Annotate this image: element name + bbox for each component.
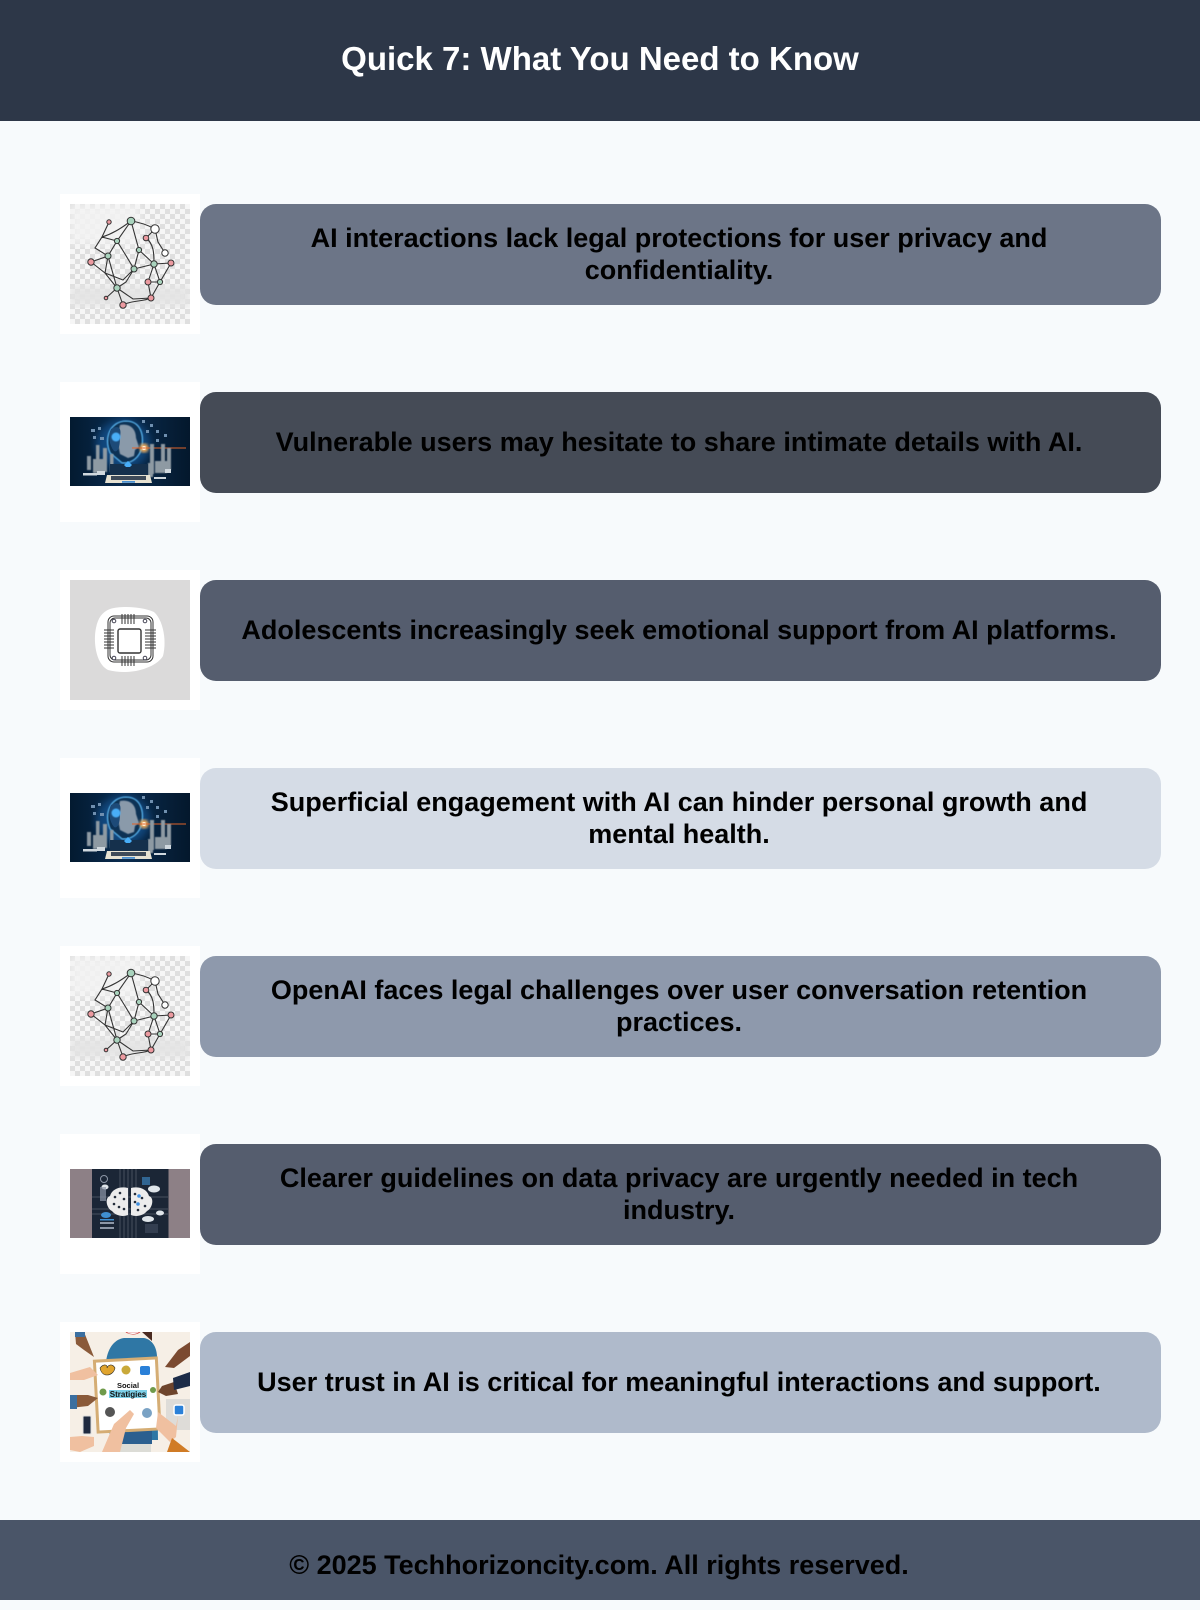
item 1 thumbnail: network graph (60, 194, 200, 334)
item 1 text bar (200, 204, 1161, 305)
item 7 text bar (200, 1332, 1161, 1433)
item 6 text bar (200, 1144, 1161, 1245)
title (0, 0, 1200, 121)
item 7 thumbnail: social strategies board (60, 1322, 200, 1462)
item 2 thumbnail: AI head over city (60, 382, 200, 522)
item 5 thumbnail: network graph (60, 946, 200, 1086)
item 7 text bar: User trust in AI is critical for meaningful interactions and support. (257, 1366, 1101, 1396)
item 5 text bar (200, 956, 1161, 1057)
item 3 text bar: Adolescents increasingly seek emotional support from AI platforms. (241, 614, 1117, 644)
item 4 text bar: Superficial engagement with AI can hinder personal growth and mental health. (271, 786, 1087, 848)
item 6 text bar: Clearer guidelines on data privacy are urgently needed in tech industry. (280, 1162, 1078, 1224)
title: Quick 7: What You Need to Know (341, 40, 859, 77)
item 6 thumbnail: brain circuit (60, 1134, 200, 1274)
item 3 text bar (200, 580, 1161, 681)
item 4 thumbnail: AI head over city (60, 758, 200, 898)
item 2 text bar: Vulnerable users may hesitate to share intimate details with AI. (276, 426, 1082, 456)
item 1 text bar: AI interactions lack legal protections for user privacy and confidentiality. (311, 222, 1047, 284)
item 7 thumbnail: social strategies board: Stratigies (110, 1390, 147, 1399)
footer (0, 1520, 1200, 1600)
item 3 thumbnail: chip (60, 570, 200, 710)
footer: © 2025 Techhorizoncity.com. All rights reserved. (289, 1550, 909, 1580)
item 4 text bar (200, 768, 1161, 869)
item 2 text bar (200, 392, 1161, 493)
item 5 text bar: OpenAI faces legal challenges over user conversation retention practices. (271, 974, 1087, 1036)
item 7 thumbnail: social strategies board: Social (117, 1381, 139, 1390)
